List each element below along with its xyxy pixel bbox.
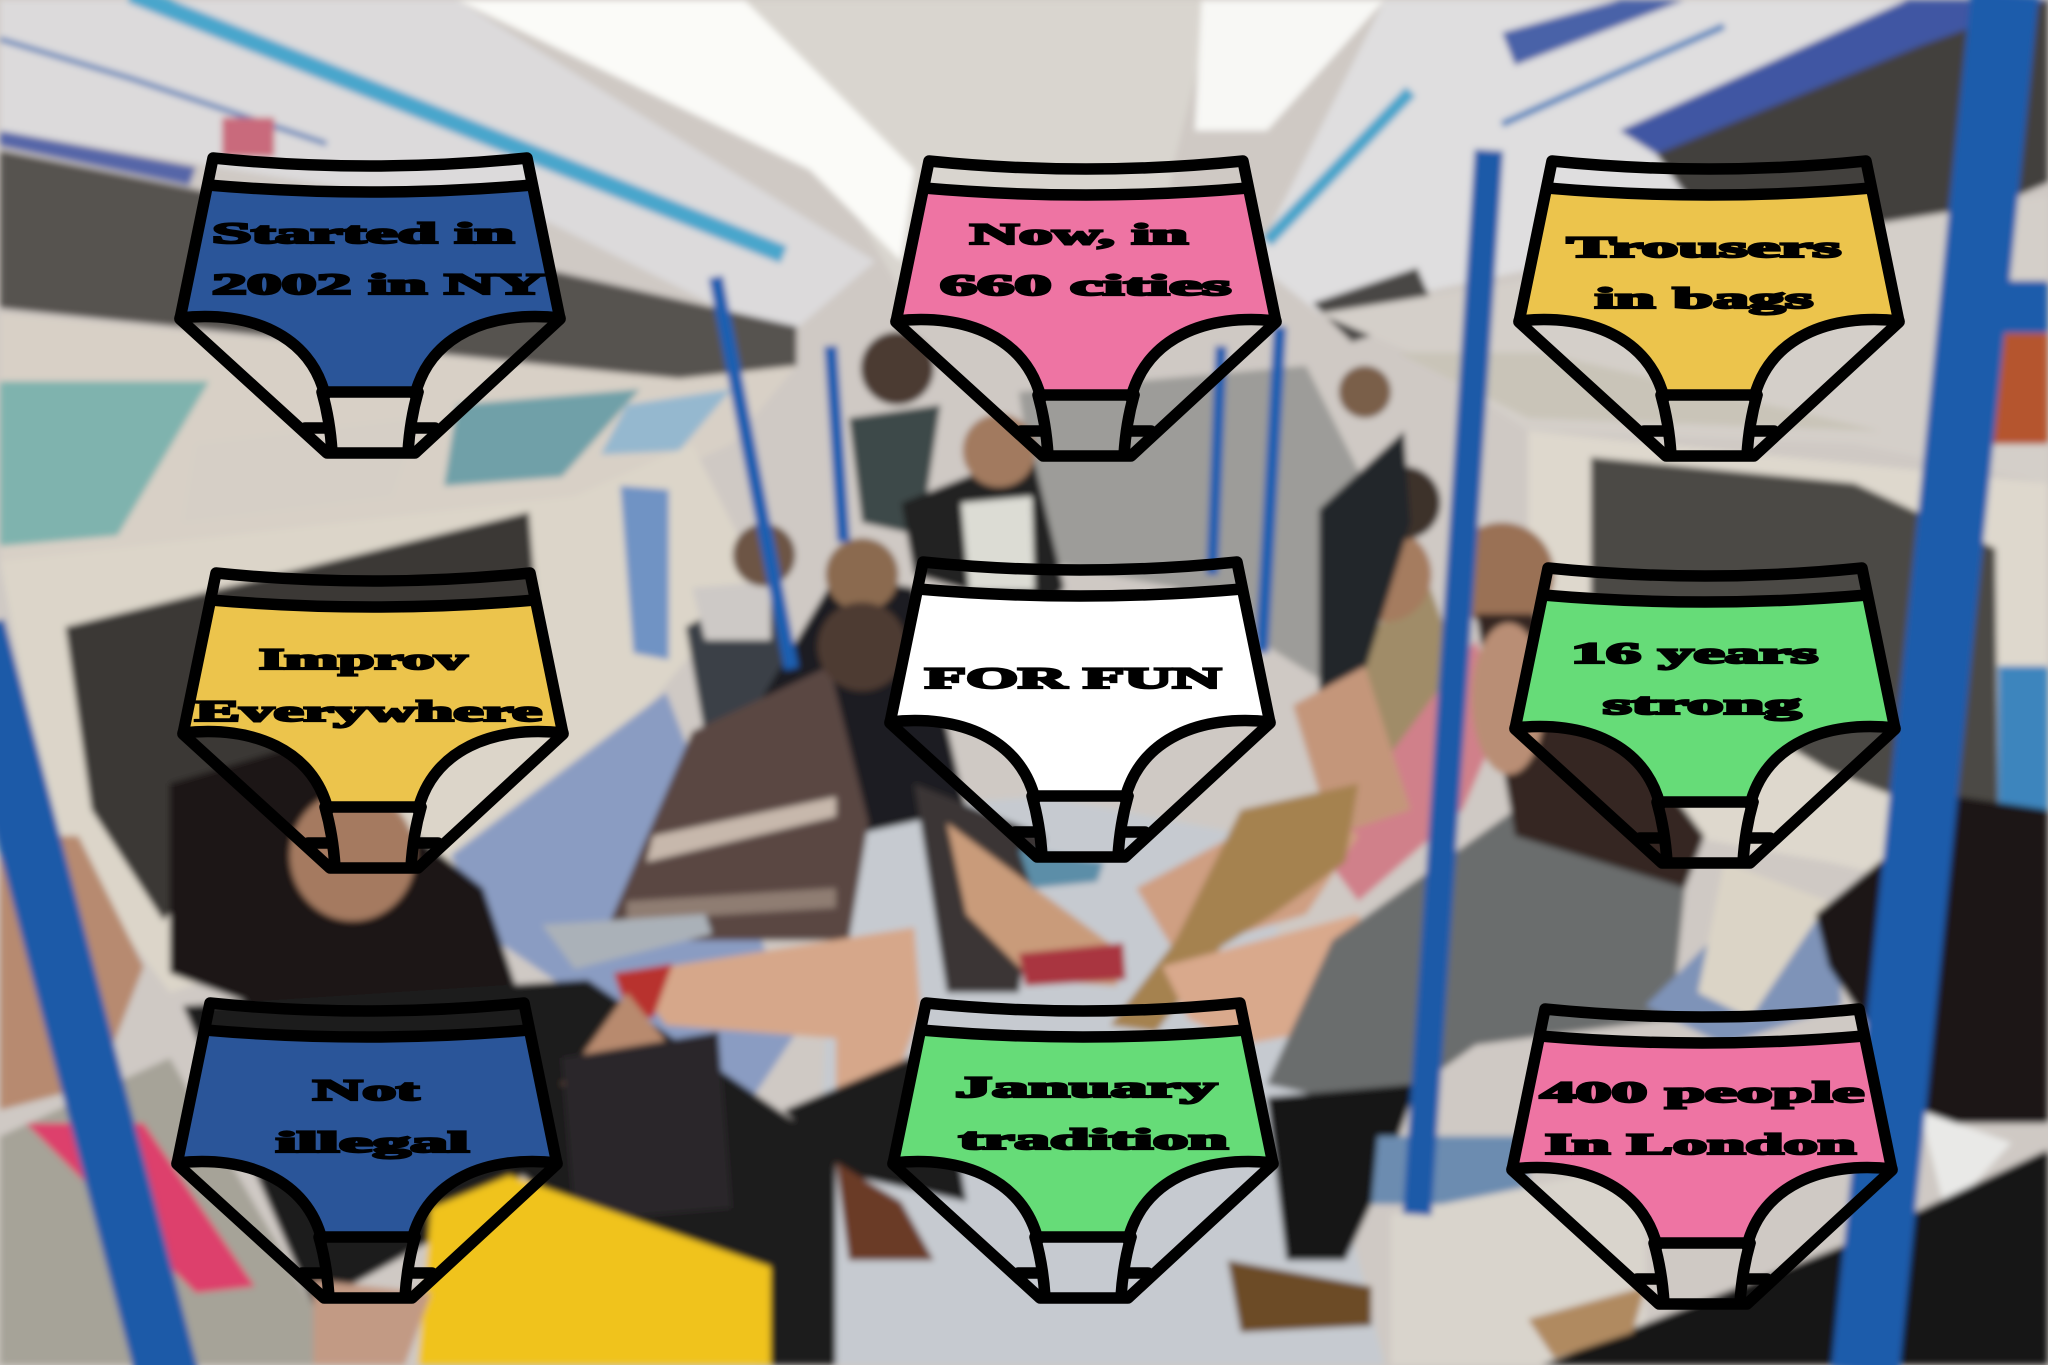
panel: Now, in 660 cities: Now, in [970,218,1189,251]
panel: Not illegal: illegal [276,1126,469,1159]
panel: Improv Everywhere: Improv [259,643,467,676]
right people [1352,588,1463,810]
centre people [849,405,940,536]
plaid man [607,666,869,940]
panel: January tradition: tradition [959,1123,1229,1156]
panel: Not illegal [177,1003,557,1298]
panel: Trousers in bags [1519,161,1899,456]
panel: 400 people In London [1512,1009,1892,1304]
poles [0,627,170,1365]
panel: January tradition: January [955,1071,1217,1104]
panel: 16 years strong: 16 years [1571,637,1818,670]
panel: 400 people In London: In London [1545,1128,1857,1161]
panel: Trousers in bags: Trousers [1567,231,1841,264]
panel: Improv Everywhere: Everywhere [195,695,542,728]
panel: Now, in 660 cities [896,161,1276,456]
panel: 400 people In London: 400 people [1540,1076,1864,1109]
panel: Improv Everywhere [183,573,563,868]
panel: Trousers in bags: in bags [1595,282,1813,315]
panel: FOR FUN [890,562,1270,857]
foreground left [0,836,144,1110]
panel: FOR FUN: FOR FUN [925,662,1222,695]
panel: 16 years strong [1515,568,1895,863]
panel: 16 years strong: strong [1603,688,1801,721]
panel: January tradition [893,1003,1273,1298]
panel: Started in 2002 in NY: 2002 in NY [212,268,546,301]
panel: Now, in 660 cities: 660 cities [940,269,1231,302]
panel: Not illegal: Not [313,1074,419,1107]
panel: Started in 2002 in NY: Started in [212,217,515,250]
panel: Started in 2002 in NY [180,158,560,453]
foreground right [1815,797,2048,1123]
